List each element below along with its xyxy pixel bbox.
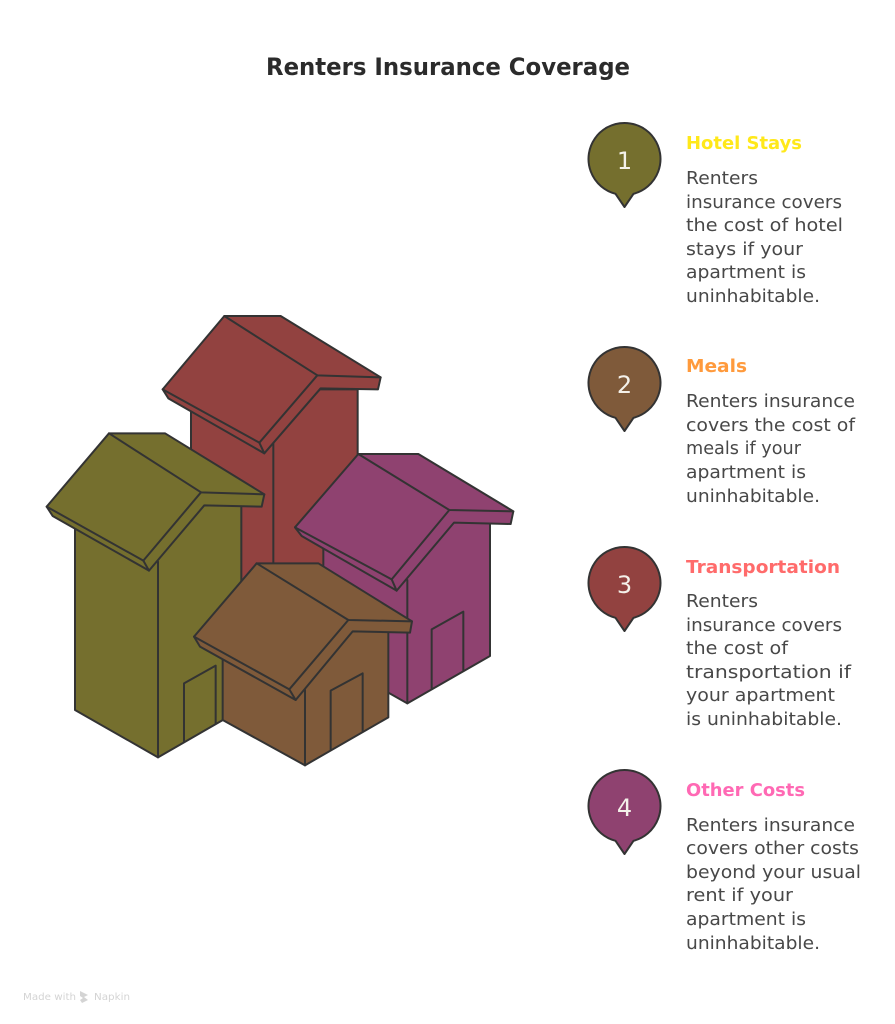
description: Other Costs [686,815,861,954]
description: Meals: uninhabitable. [686,486,820,507]
description: Transportation: is uninhabitable. [686,709,842,730]
heading: Other Costs: Other Costs [686,780,805,801]
description: Meals: Renters insurance [686,391,855,412]
description: Other Costs: uninhabitable. [686,933,820,954]
item 4: Other Costs [588,770,861,954]
pin 4: 4 [617,794,632,822]
pin 3 [588,547,660,631]
pin 1 [588,123,660,207]
pin 2 [588,347,660,431]
pin 4 [588,770,660,854]
house: brown (Meals) [194,563,412,765]
house: olive (Hotel Stays) [47,433,264,757]
item 3: Transportation [588,547,852,730]
door: brown house [331,673,363,750]
description: Meals [686,391,856,507]
door: purple house [432,612,463,688]
description: Other Costs: rent if your [686,885,794,906]
door: olive house [184,666,216,742]
description: Other Costs: covers other costs [686,838,859,859]
description: Transportation: transportation if [686,662,852,683]
description: Transportation: insurance covers [686,615,842,636]
watermark: Napkin [94,992,130,1003]
item 2: Meals [588,347,856,507]
house: purple (Other Costs) [295,454,513,703]
watermark: Made with [23,992,76,1003]
description: Meals: apartment is [686,462,806,483]
description: Hotel Stays: uninhabitable. [686,286,820,307]
heading: Meals: Meals [686,356,747,377]
item 1: Hotel Stays [588,123,843,307]
description: Transportation: the cost of [686,638,789,659]
pin 2: 2 [617,371,632,399]
description: Meals: meals if your [686,438,802,459]
description: Other Costs: apartment is [686,909,806,930]
description: Hotel Stays: apartment is [686,262,806,283]
description: Other Costs: beyond your usual [686,862,861,883]
description: Hotel Stays [686,168,843,307]
description: Transportation: Renters [686,591,758,612]
heading: Hotel Stays: Hotel Stays [686,133,802,154]
watermark [23,991,130,1003]
description: Meals: covers the cost of [686,415,856,436]
description: Other Costs: Renters insurance [686,815,855,836]
pin 1: 1 [617,147,632,175]
icon: Napkin logo [80,991,88,1003]
description: Hotel Stays: the cost of hotel [686,215,843,236]
house: red (Transportation) [163,316,381,600]
pin 3: 3 [617,571,632,599]
illustration: four isometric houses [47,316,513,765]
description: Hotel Stays: Renters [686,168,758,189]
description: Hotel Stays: stays if your [686,239,804,260]
heading: Transportation: Transportation [686,557,840,578]
description: Transportation [686,591,852,730]
title: Renters Insurance Coverage [266,53,630,81]
description: Hotel Stays: insurance covers [686,192,842,213]
description: Transportation: your apartment [686,685,835,706]
